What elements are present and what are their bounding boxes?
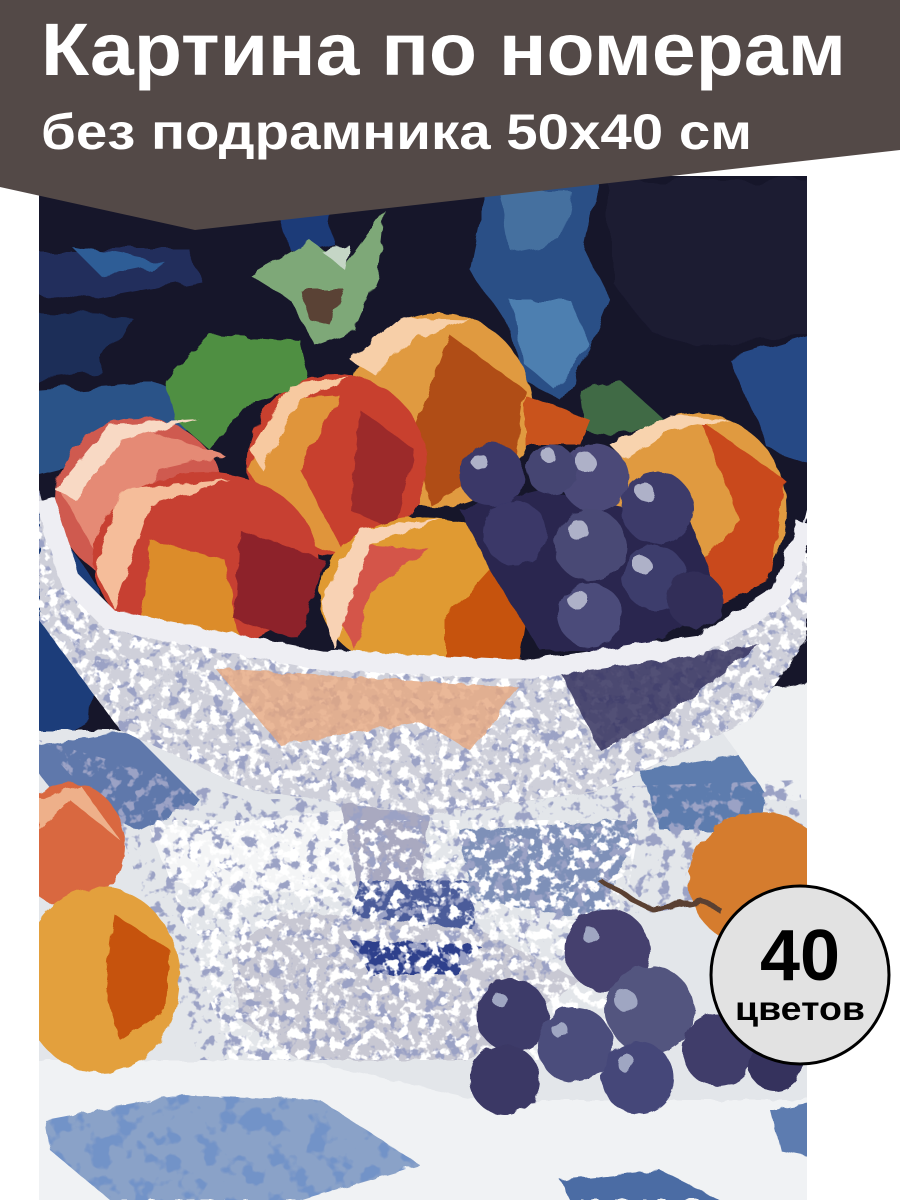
title: Картина по номерам [41,8,846,91]
peach: table left lower [20,887,180,1073]
peach: front left [93,472,325,648]
small peach behind grapes [525,395,590,445]
grapes in the bowl [460,443,723,650]
painting [15,160,832,1200]
peach: far left [55,418,225,582]
peach: right [603,413,787,607]
leaves [165,210,670,450]
badge label: цветов [735,990,865,1027]
crystal bowl [39,490,807,815]
peaches in the bowl [55,313,787,673]
header banner [0,0,900,230]
peach: front centre [319,517,529,673]
cloth texture [39,740,807,1200]
peach: top centre [348,313,532,507]
peach: upper middle [247,375,427,555]
painting background: dark drapery [39,184,807,732]
grapes on the table [470,880,801,1115]
badge number: 40 [760,916,840,996]
peach: table left upper [39,782,126,904]
bowl rim highlight [45,500,807,670]
peach: table right [688,812,832,948]
bowl reflection: grapes [560,645,760,750]
bowl reflection: peaches [215,668,520,750]
subtitle: без подрамника 50х40 см [41,104,752,160]
table cloth [20,680,830,1200]
badge: colour count [711,886,889,1064]
peaches on the table [15,783,832,1073]
